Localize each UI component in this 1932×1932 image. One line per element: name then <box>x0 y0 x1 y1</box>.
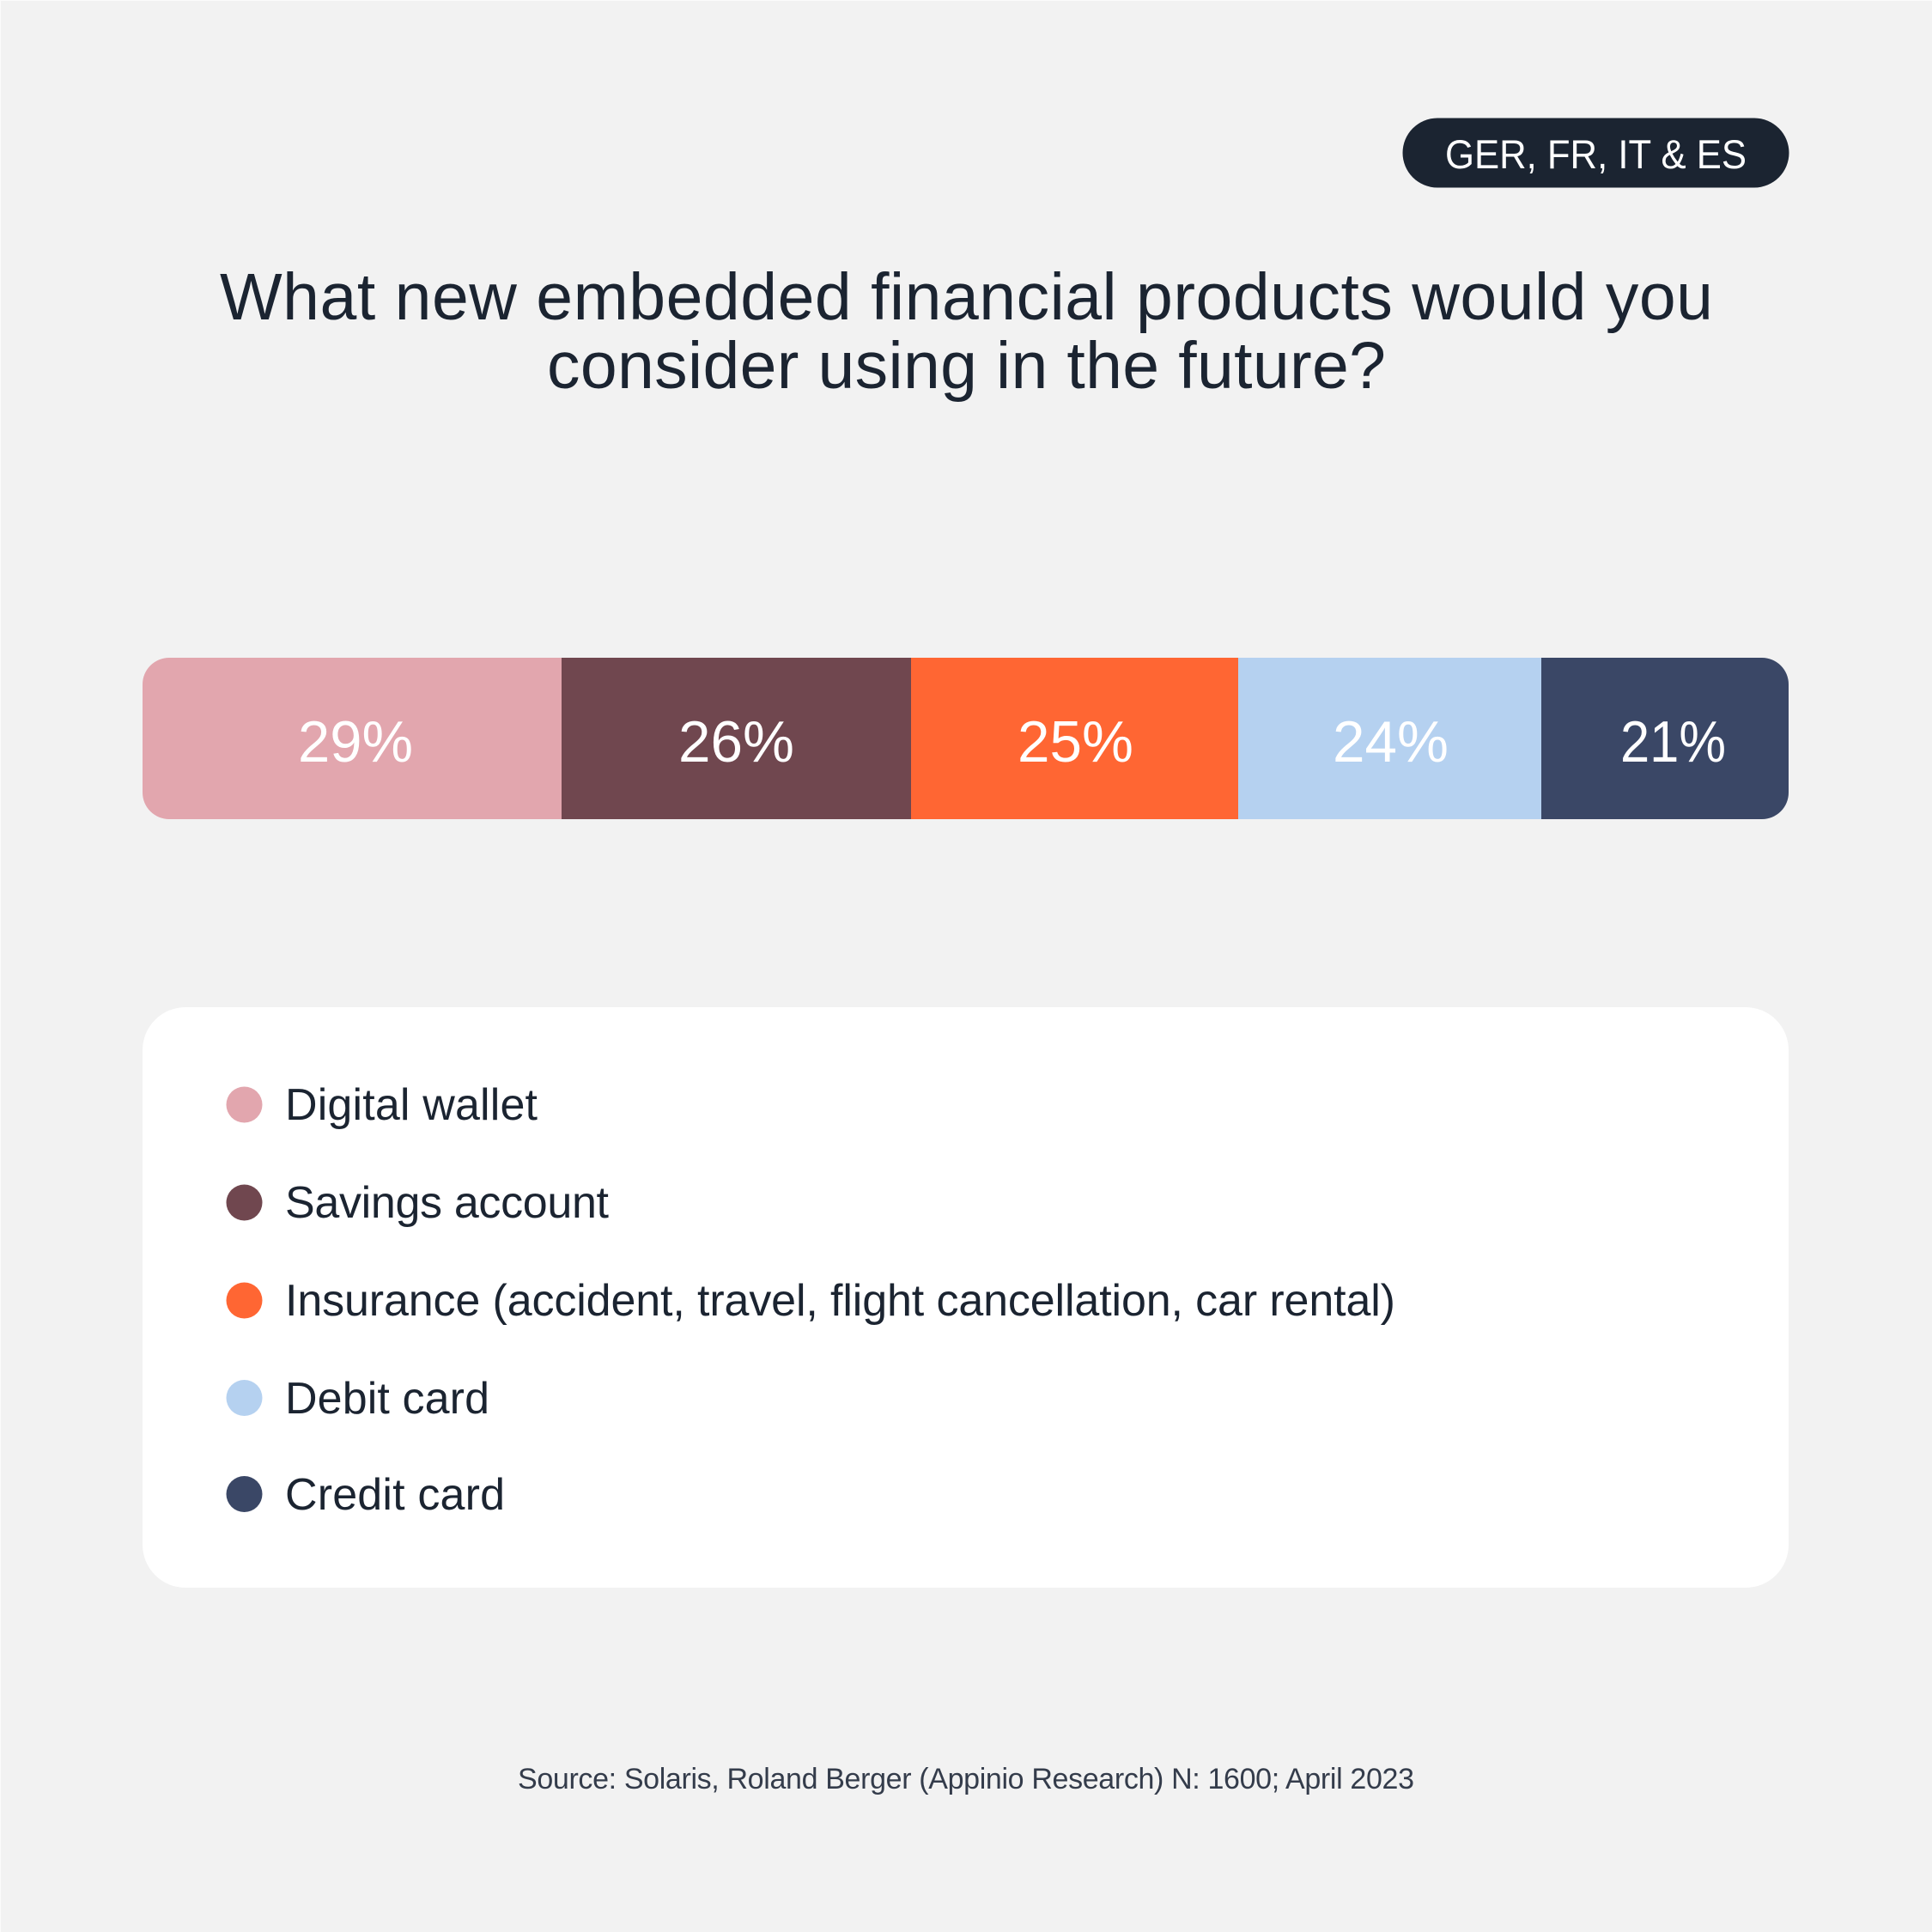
title: What new embedded financial products would you <box>220 260 1713 334</box>
segment: digital wallet 29% <box>143 658 562 819</box>
region badge <box>1403 118 1789 187</box>
legend item: digital wallet: Digital wallet <box>285 1080 538 1130</box>
segment: insurance 25%: 25% <box>1018 709 1133 775</box>
segment: digital wallet 29%: 29% <box>298 709 413 775</box>
legend item: insurance: Insurance (accident, travel, flight cancellation, car rental) <box>285 1276 1395 1326</box>
segment: savings account 26%: 26% <box>678 709 794 775</box>
legend item: debit card: Debit card <box>285 1374 489 1424</box>
segment: credit card 21% <box>1541 658 1789 819</box>
source note: Source: Solaris, Roland Berger (Appinio Research) N: 1600; April 2023 <box>518 1763 1414 1795</box>
segment: insurance 25% <box>911 658 1238 819</box>
segment: debit card 24% <box>1238 658 1541 819</box>
panel: legend <box>143 1007 1789 1588</box>
segment: savings account 26% <box>562 658 911 819</box>
region badge: GER, FR, IT & ES <box>1445 131 1747 177</box>
title: consider using in the future? <box>547 329 1386 403</box>
segment: debit card 24%: 24% <box>1333 709 1449 775</box>
legend item: savings account: Savings account <box>285 1178 610 1228</box>
stacked bar chart <box>143 658 1789 819</box>
segment: credit card 21%: 21% <box>1620 709 1726 775</box>
legend item: credit card: Credit card <box>285 1470 505 1520</box>
title <box>220 260 1713 403</box>
